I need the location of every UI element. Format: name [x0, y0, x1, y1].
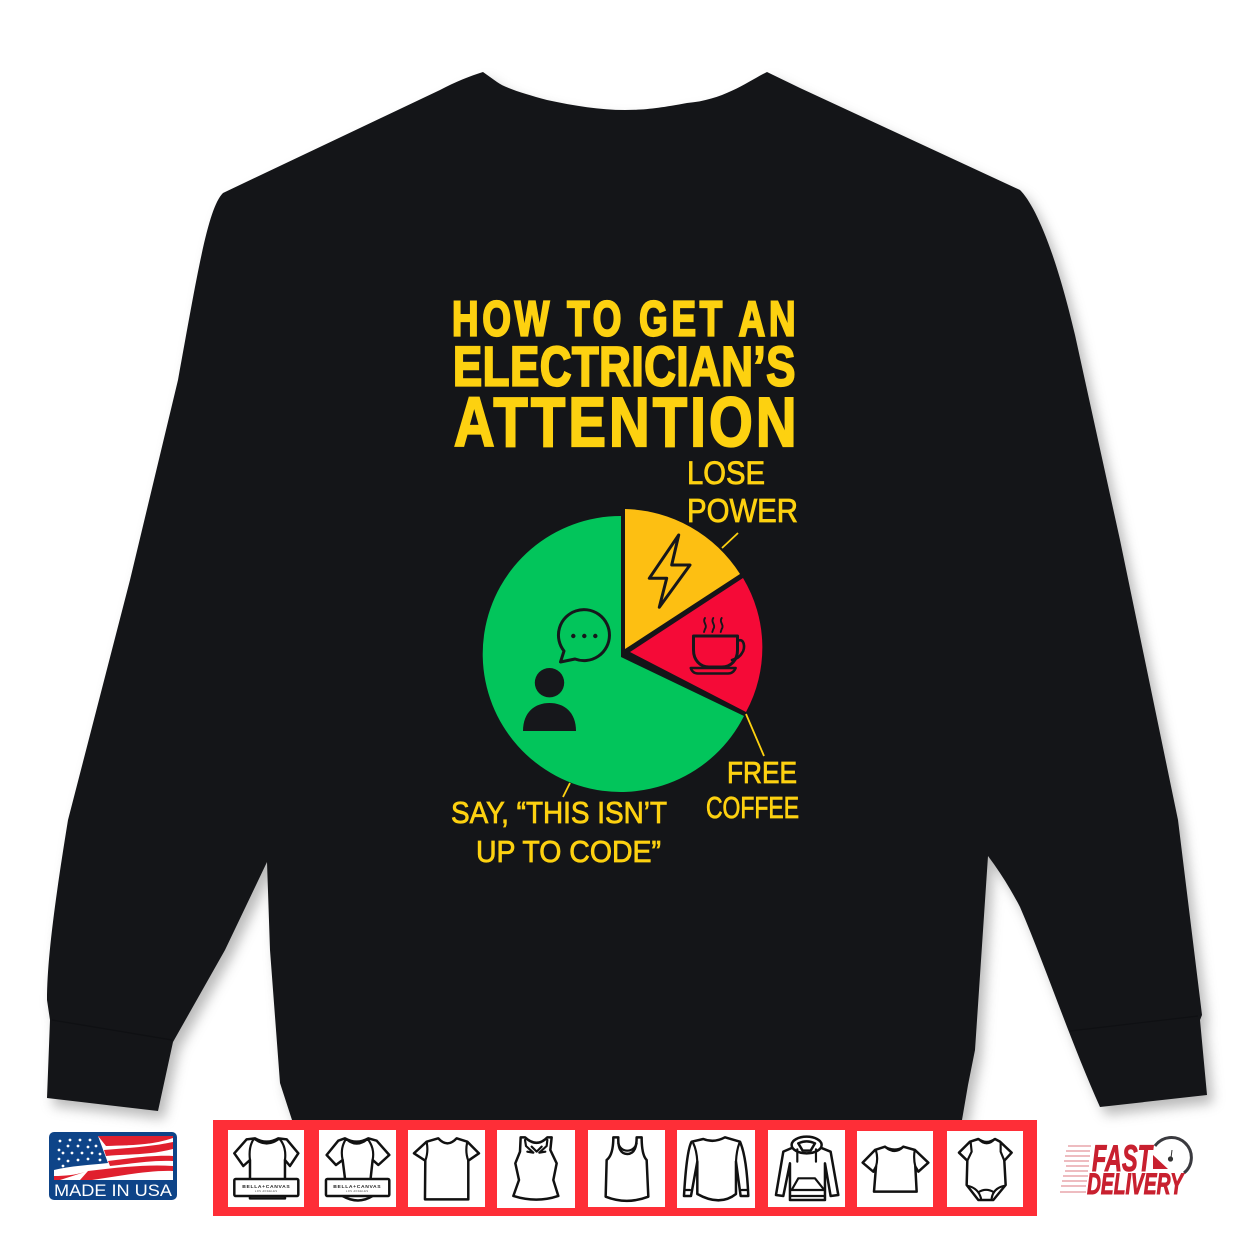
card: bella canvas unisex tee: BELLA+CANVAS — [242, 1184, 290, 1190]
pie chart — [483, 509, 762, 792]
label: free coffee — [706, 755, 799, 825]
label: free coffee: FREE — [727, 755, 797, 790]
card: long sleeve tee — [677, 1130, 755, 1208]
title — [452, 293, 796, 461]
card: racerback tank — [497, 1130, 575, 1208]
card: bella canvas women's tee: BELLA+CANVAS — [333, 1184, 381, 1190]
logo: fast delivery — [1060, 1137, 1191, 1201]
title: ATTENTION — [454, 384, 796, 461]
badge text: MADE IN USA — [54, 1181, 173, 1200]
label: say this isn't up to code: SAY, “THIS ISN’T — [451, 795, 667, 830]
icon: american flag — [54, 1136, 173, 1180]
icon: person — [523, 668, 576, 731]
sweatshirt shadow — [53, 80, 1213, 1128]
card: hoodie — [768, 1130, 845, 1207]
label: free coffee: COFFEE — [706, 790, 799, 825]
speed lines — [1060, 1146, 1091, 1192]
card: crop tee — [857, 1131, 933, 1207]
card: bella canvas women's tee: LOS ANGELES — [346, 1190, 368, 1193]
card: bella canvas unisex tee: LOS ANGELES — [255, 1190, 277, 1193]
label: say this isn't up to code — [451, 795, 667, 869]
card: bella canvas unisex tee — [228, 1130, 304, 1207]
title: HOW TO GET AN — [452, 293, 796, 347]
title: ELECTRICIAN’S — [453, 335, 795, 398]
card: baby onesie — [947, 1131, 1023, 1207]
logo: fast delivery: FAST — [1092, 1138, 1154, 1179]
card: tank top — [588, 1130, 665, 1207]
leader lines — [563, 533, 764, 797]
icon: speech bubble — [558, 610, 609, 662]
badge: made in usa — [49, 1132, 177, 1200]
card: classic tee — [408, 1130, 485, 1207]
panel: product strip — [213, 1120, 1037, 1216]
card: bella canvas women's tee — [319, 1130, 396, 1207]
icon: coffee cup — [691, 618, 744, 674]
label: lose power: POWER — [687, 492, 798, 529]
sweatshirt — [47, 72, 1207, 1120]
label: lose power — [687, 455, 798, 529]
gauge — [1153, 1137, 1191, 1173]
logo: fast delivery: DELIVERY — [1087, 1168, 1185, 1201]
slice: say this isn't up to code — [483, 516, 744, 792]
icon: lightning bolt — [649, 535, 690, 607]
label: say this isn't up to code: UP TO CODE” — [476, 834, 661, 869]
slice: lose power — [625, 509, 740, 649]
label: lose power: LOSE — [687, 455, 765, 491]
slice: free coffee — [630, 578, 762, 712]
